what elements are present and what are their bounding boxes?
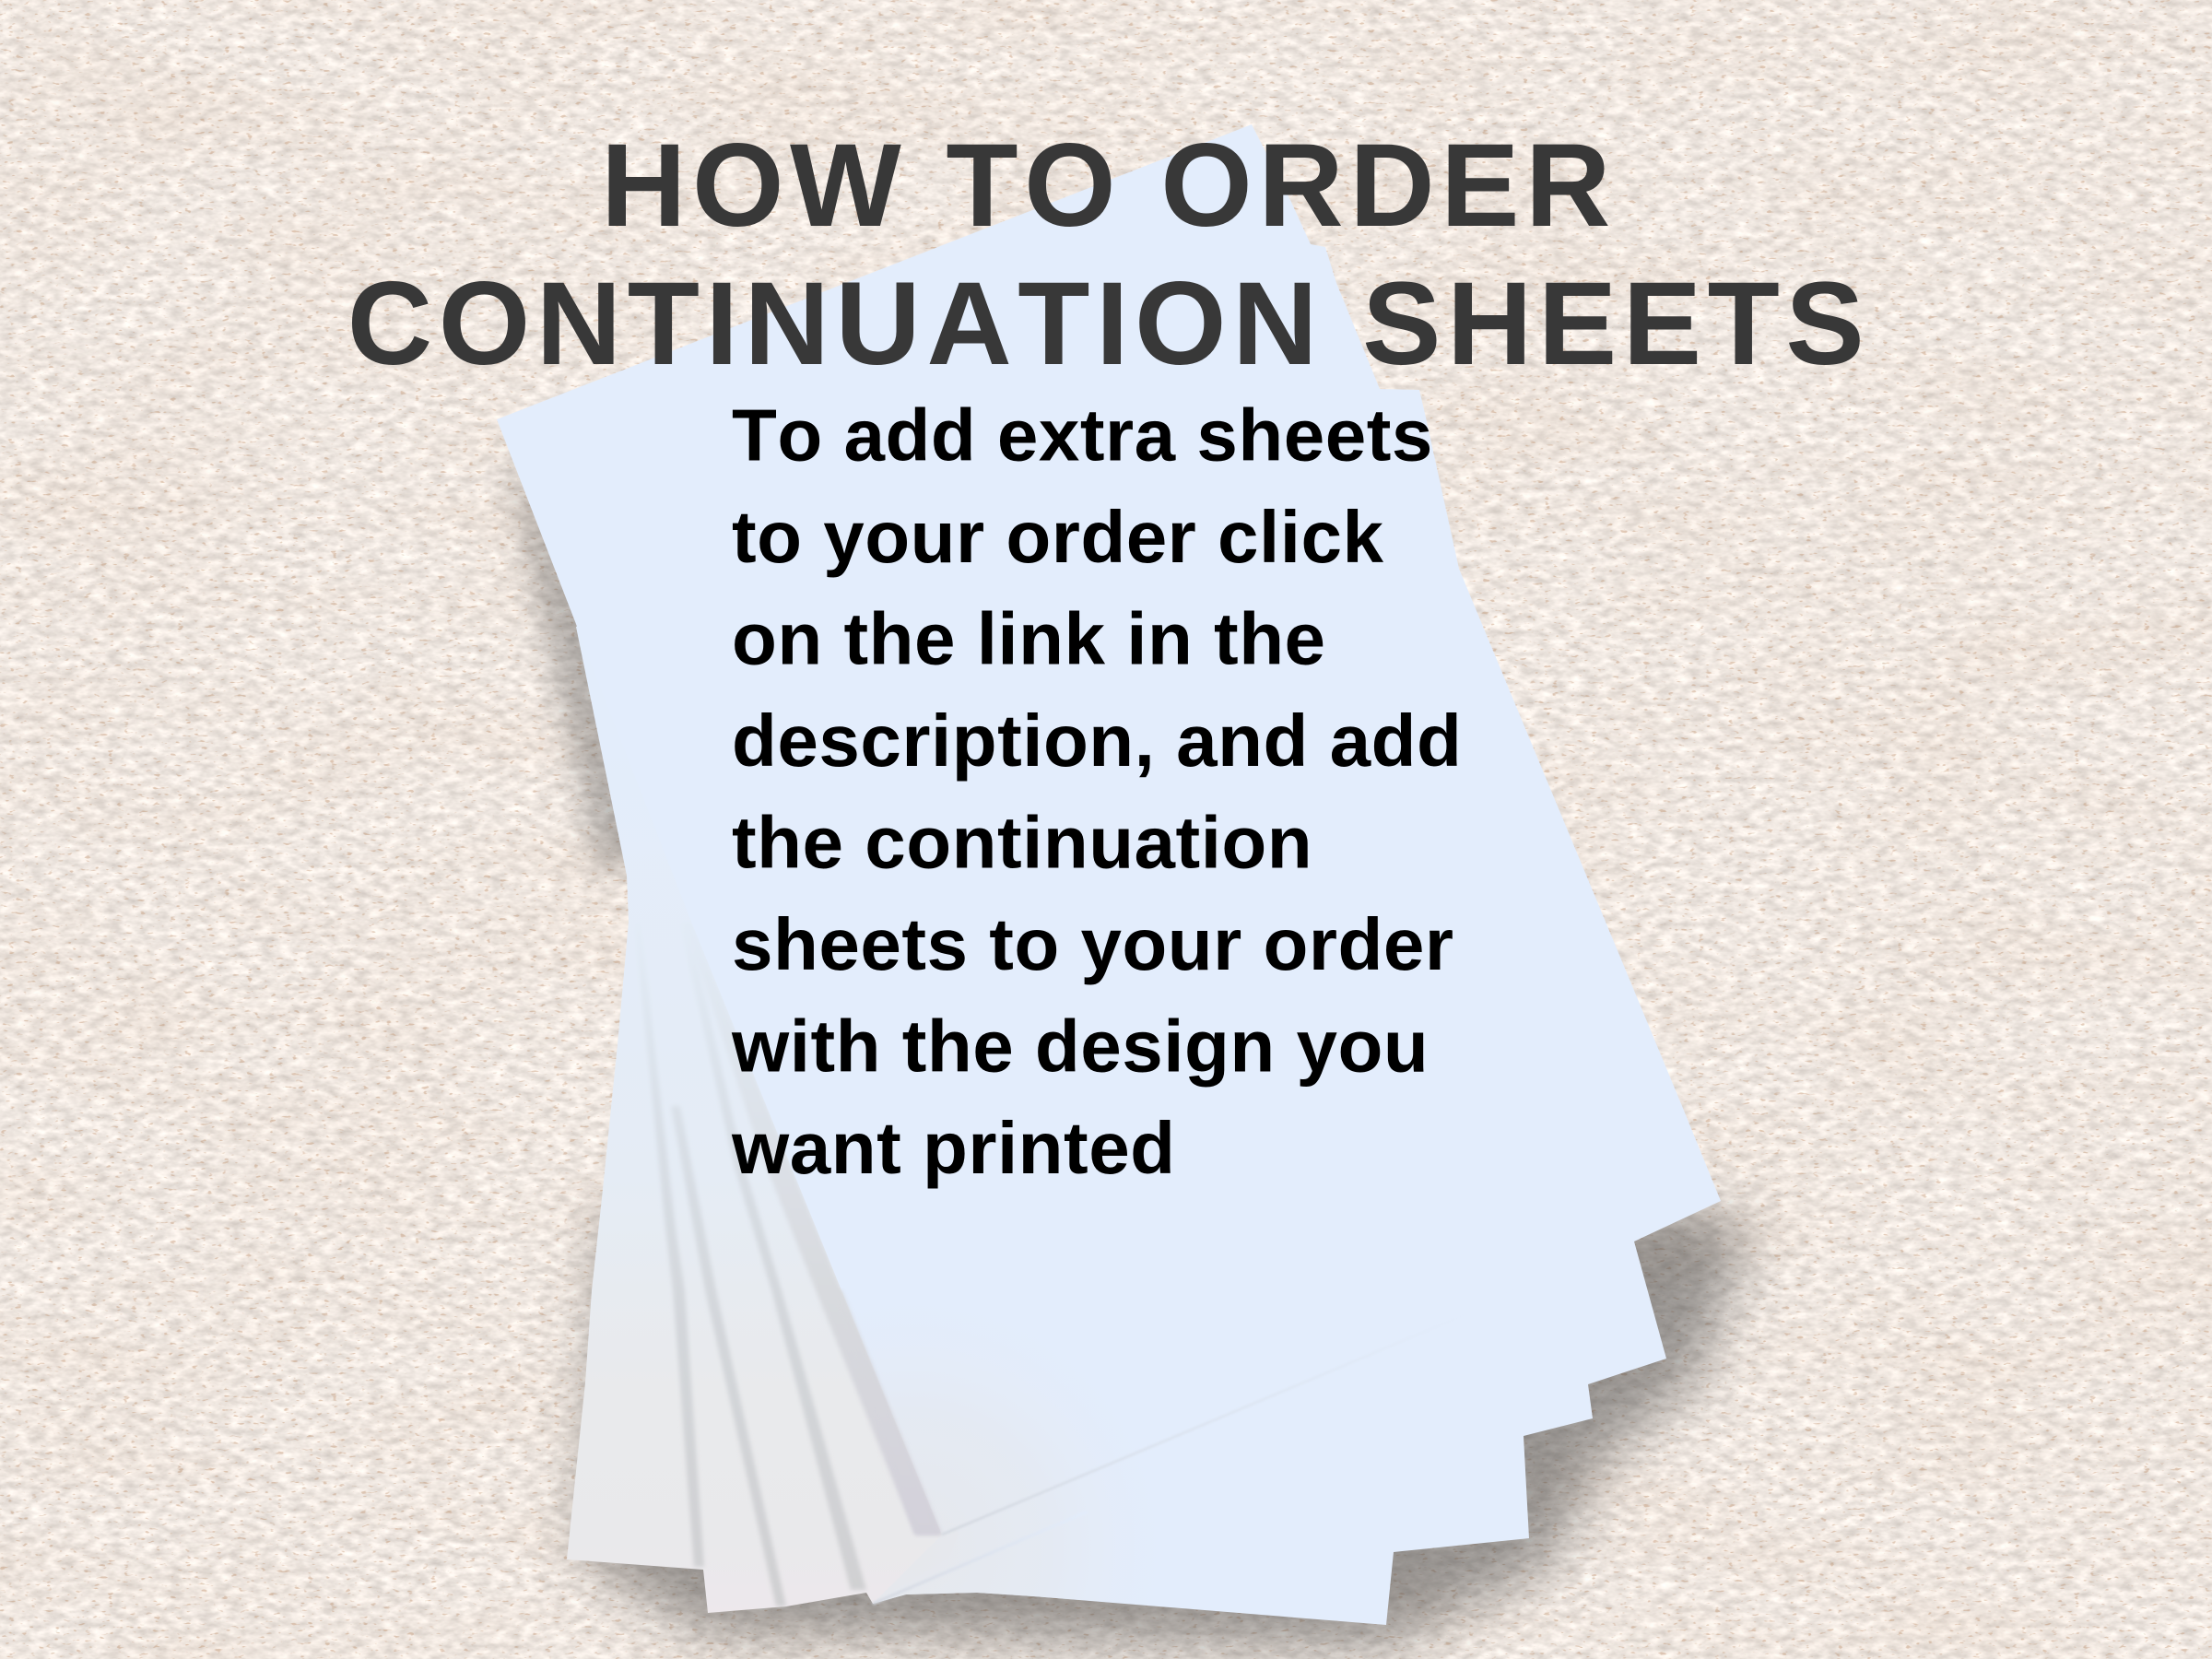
title: CONTINUATION SHEETS [347, 258, 1870, 390]
sheet shadow bands [634, 922, 942, 1606]
top sheet [497, 124, 1721, 1535]
instructions text: on the link in the [732, 597, 1326, 680]
instructions text: description, and add [732, 700, 1462, 782]
lower-left corner shading [737, 922, 1290, 1608]
back sheets: left fan [567, 618, 959, 1613]
left fan edge repaint [830, 1290, 942, 1535]
instructions text: To add extra sheets [732, 394, 1433, 476]
instructions text: the continuation [732, 802, 1312, 883]
back sheets: lower right silhouette [737, 461, 1721, 1625]
instructions text: to your order click [732, 496, 1383, 578]
instructions text: sheets to your order [732, 903, 1454, 985]
sheet creases [873, 1311, 1475, 1604]
title: HOW TO ORDER [601, 120, 1617, 252]
instructions text: with the design you [731, 1005, 1429, 1088]
paper stack shadow [502, 442, 1751, 1650]
instructions text: want printed [731, 1107, 1176, 1189]
paper stack [497, 124, 1721, 1625]
